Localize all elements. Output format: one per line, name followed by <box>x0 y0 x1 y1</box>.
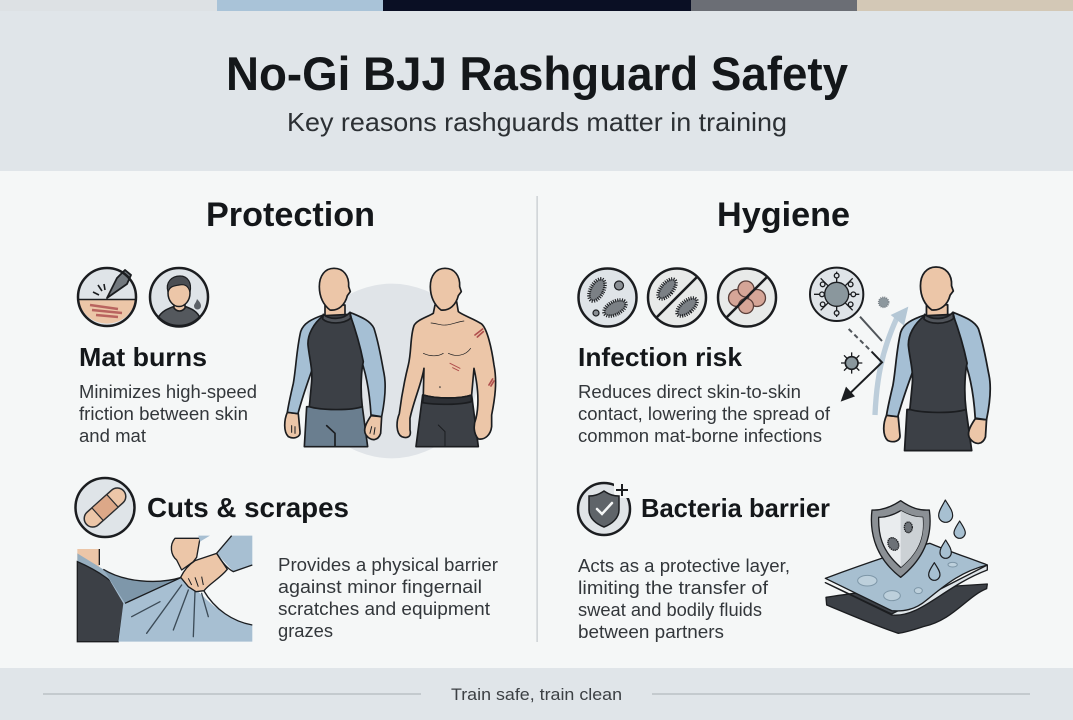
footer band <box>0 668 1073 720</box>
icon: person with friction burn <box>150 268 208 327</box>
footer text: Train safe, train clean <box>451 685 622 704</box>
icon: virus <box>810 268 863 321</box>
figure: bare torso with abrasions <box>397 268 496 447</box>
title: No-Gi BJJ Rashguard Safety <box>226 47 848 100</box>
text: cuts and scrapes description: scratches and equipment <box>278 599 490 619</box>
heading: Cuts & scrapes: Cuts & scrapes <box>147 492 349 523</box>
icon: mat friction <box>78 268 136 326</box>
text: mat burns description: and mat <box>79 426 146 446</box>
illustration: fabric being pulled <box>77 536 252 642</box>
text: infection risk description: Reduces direct skin-to-skin <box>578 382 801 402</box>
top colour strip <box>0 0 1073 11</box>
text: cuts and scrapes description: Provides a physical barrier <box>278 555 498 575</box>
text: bacteria barrier description: sweat and bodily fluids <box>578 600 762 620</box>
icon: crossed-out skin infection <box>718 268 776 326</box>
figure: rashguard torso <box>884 267 990 451</box>
icon: adhesive bandage <box>76 478 134 537</box>
text: bacteria barrier description: Acts as a protective layer, <box>578 556 790 576</box>
figures: rashguard vs bare skin <box>285 268 496 458</box>
abrasions <box>450 329 494 386</box>
heading: Protection: Protection <box>206 196 375 234</box>
header band <box>0 11 1073 171</box>
droplets <box>929 500 965 580</box>
icon: shield check <box>578 482 630 535</box>
shield <box>871 501 930 577</box>
figure: rashguard wearer <box>285 268 385 447</box>
subtitle: Key reasons rashguards matter in training <box>287 107 787 137</box>
icon: crossed-out bacteria <box>648 268 706 326</box>
text: bacteria barrier description <box>578 556 790 642</box>
text: bacteria barrier description: between partners <box>578 622 724 642</box>
text: bacteria barrier description: limiting the transfer of <box>578 578 769 598</box>
heading: Hygiene: Hygiene <box>717 196 850 234</box>
text: infection risk description: contact, lowering the spread of <box>578 404 831 424</box>
text: infection risk description <box>578 382 831 446</box>
heading: Bacteria barrier: Bacteria barrier <box>641 493 830 523</box>
heading: Infection risk: Infection risk <box>578 342 743 372</box>
text: mat burns description: Minimizes high-speed <box>79 382 257 402</box>
text: cuts and scrapes description: against minor fingernail <box>278 577 482 597</box>
text: mat burns description <box>79 382 257 446</box>
text: infection risk description: common mat-borne infections <box>578 426 822 446</box>
illustration: pathogens deflected from rashguard <box>810 268 908 415</box>
illustration: fabric layers with shield and droplets <box>825 500 987 633</box>
heading: Mat burns: Mat burns <box>79 342 207 372</box>
text: cuts and scrapes description <box>278 555 498 641</box>
text: mat burns description: friction between skin <box>79 404 248 424</box>
icon: microbes <box>578 268 636 326</box>
text: cuts and scrapes description: grazes <box>278 621 333 641</box>
